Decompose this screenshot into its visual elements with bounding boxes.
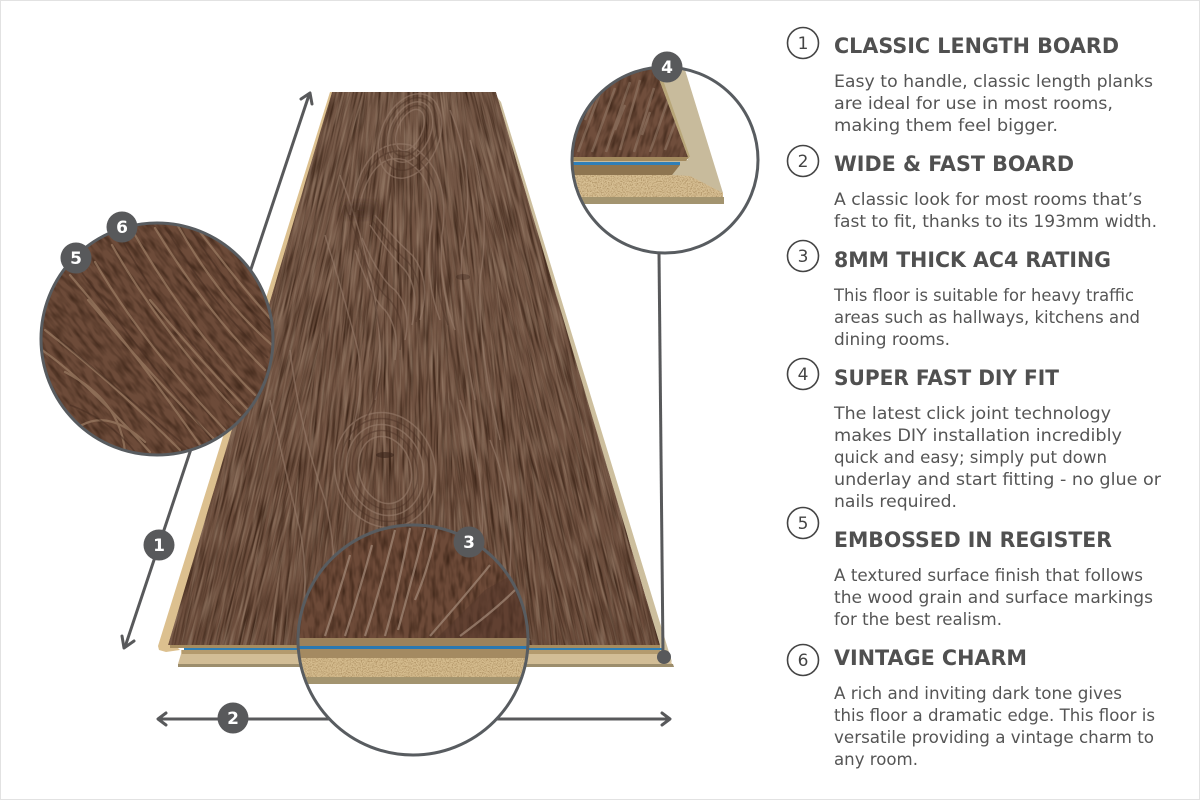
arrow: board length (122, 93, 312, 648)
joint edge (582, 197, 724, 204)
description 1: making them feel bigger. (834, 116, 1058, 135)
description 4: The latest click joint technology (833, 404, 1111, 423)
description 2: fast to fit, thanks to its 193mm width. (834, 212, 1157, 231)
description 4: nails required. (834, 492, 957, 511)
number 1: 1 (798, 34, 808, 54)
heading 2: WIDE & FAST BOARD (834, 152, 1074, 176)
magnified top layer (296, 638, 530, 646)
wood cathedral grain, light rings (270, 84, 530, 640)
description 2 (834, 190, 1157, 231)
plank illustration (158, 92, 674, 667)
heading 5: EMBOSSED IN REGISTER (834, 528, 1112, 552)
description 1: Easy to handle, classic length planks (834, 72, 1153, 91)
wood knots (343, 203, 470, 458)
plank core base layer (178, 650, 674, 667)
joint wood surface (574, 70, 688, 157)
magnified grain lines (325, 528, 515, 636)
description 5: A textured surface finish that follows (834, 566, 1143, 585)
description 5: for the best realism. (834, 610, 1002, 629)
description 6: versatile providing a vintage charm to (834, 728, 1154, 747)
badge 1 (144, 530, 174, 560)
description 3 (833, 286, 1140, 349)
joint core speckle (565, 175, 725, 197)
feature 5: embossed in register (788, 508, 1153, 629)
badge 4: 4 (661, 58, 673, 78)
number 2 (788, 146, 818, 176)
number 6 (788, 644, 818, 676)
joint blue underlay (565, 162, 680, 165)
zoom circle: plank cross-section (3) (296, 523, 530, 755)
badge 3 (454, 526, 484, 558)
number 6: 6 (798, 651, 808, 671)
description 3: dining rooms. (834, 330, 950, 349)
number 3 (788, 240, 818, 272)
description 4 (833, 404, 1161, 511)
zoom circle: surface texture (5, 6) (40, 222, 274, 456)
feature 3: 8mm thick AC4 rating (788, 240, 1140, 349)
description 5: the wood grain and surface markings (834, 588, 1153, 607)
magnified wood (296, 523, 530, 639)
feature 1: classic length board (788, 28, 1153, 135)
badge 4 (652, 52, 682, 82)
heading 1: CLASSIC LENGTH BOARD (834, 34, 1119, 58)
heading 3: 8MM THICK AC4 RATING (834, 248, 1111, 272)
plank underside shadow (182, 650, 662, 654)
description 5 (834, 566, 1153, 629)
arrow: board width (158, 713, 670, 725)
description 6 (834, 684, 1155, 769)
description 3: This floor is suitable for heavy traffic (833, 286, 1134, 305)
description 3: areas such as hallways, kitchens and (834, 308, 1140, 327)
description 6: any room. (834, 750, 918, 769)
badge 6 (106, 212, 138, 242)
description 6: A rich and inviting dark tone gives (834, 684, 1122, 703)
number 5: 5 (798, 514, 808, 534)
magnified core shadow (296, 649, 530, 658)
number 4 (788, 358, 818, 390)
joint shadow (565, 165, 680, 175)
feature 6: vintage charm (788, 644, 1155, 769)
plank core lower edge (178, 664, 674, 667)
blue underlay strip (184, 648, 662, 650)
description 6: this floor a dramatic edge. This floor is (834, 706, 1155, 725)
heading 6: VINTAGE CHARM (834, 646, 1027, 670)
badge 2: 2 (227, 709, 239, 729)
joint core (574, 70, 723, 193)
embossed grain lines (42, 226, 272, 452)
badge 1: 1 (153, 536, 165, 556)
magnified core (296, 658, 530, 677)
feature 4: super fast DIY fit (788, 358, 1161, 511)
joint edge strip (660, 80, 690, 157)
joint top layer (565, 157, 689, 161)
description 4: quick and easy; simply put down (834, 448, 1107, 467)
magnified blue underlay (296, 646, 530, 649)
magnified core edge (296, 677, 530, 684)
zoom circle: click joint (4) (570, 66, 760, 254)
number 2: 2 (798, 152, 808, 172)
right groove edge (497, 97, 672, 662)
description 4: underlay and start fitting - no glue or (834, 470, 1161, 489)
badge 5: 5 (70, 249, 82, 269)
description 1 (834, 72, 1153, 135)
wood cathedral grain, dark rings (340, 97, 448, 522)
badge 2 (218, 702, 248, 734)
heading 4: SUPER FAST DIY FIT (834, 366, 1060, 390)
wood surface (168, 92, 660, 645)
badge 6: 6 (116, 218, 128, 238)
number 1 (788, 28, 818, 58)
number 5 (788, 508, 818, 538)
leader line to joint (657, 253, 671, 664)
badge 5 (60, 242, 92, 274)
badge 3: 3 (463, 533, 475, 553)
left tongue edge (158, 92, 334, 652)
number 4: 4 (798, 365, 808, 385)
number 3: 3 (798, 247, 808, 267)
description 2: A classic look for most rooms that’s (834, 190, 1142, 209)
top layer strip (170, 645, 660, 648)
description 4: makes DIY installation incredibly (834, 426, 1122, 445)
feature 2: wide and fast board (788, 146, 1157, 231)
embossed grain shadows (60, 227, 271, 452)
joint core lower tan (575, 175, 723, 197)
description 1: are ideal for use in most rooms, (834, 94, 1113, 113)
